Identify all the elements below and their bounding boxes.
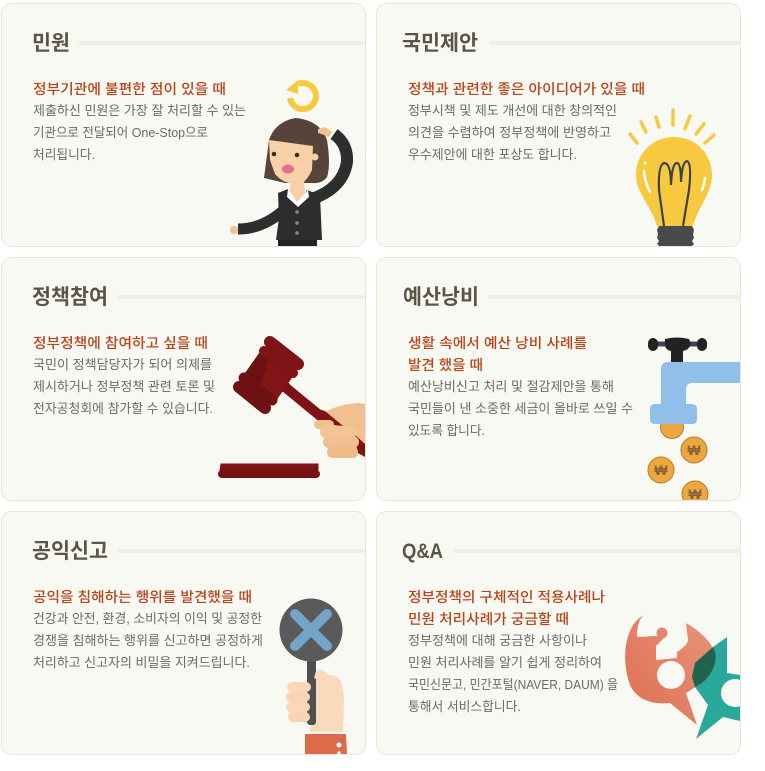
icon: faucet dripping coins: ₩ [654,462,668,478]
subheading: 국민제안: 정책과 관련한 좋은 아이디어가 있을 때 [408,81,645,97]
text block: 국민제안: 정부시책 및 제도 개선에 대한 창의적인 [408,103,617,118]
text block: 국민제안: 우수제안에 대한 포상도 합니다. [408,147,577,162]
heading: 예산낭비: 예산낭비 [403,286,479,309]
heading: 정책참여: 정책참여 [32,286,108,309]
text block: 국민제안 [408,103,617,162]
subheading: 예산낭비 [408,335,587,373]
text block: Q&A: 통해서 서비스합니다. [408,699,521,714]
heading: Q&A: Q&A [402,540,443,563]
text block: 공익신고: 건강과 안전, 환경, 소비자의 이익 및 공정한 [33,611,262,626]
text block: 공익신고: 처리하고 신고자의 비밀을 지켜드립니다. [33,655,250,670]
text block: 정책참여: 전자공청회에 참가할 수 있습니다. [33,401,213,416]
panel: 민원 [2,4,366,246]
text block: 정책참여: 국민이 정책담당자가 되어 의제를 [33,357,212,372]
subheading: Q&A [408,589,605,627]
text block: 예산낭비: 예산낭비신고 처리 및 절감제안을 통해 [408,379,614,394]
text block: Q&A: 국민신문고, 민간포털(NAVER, DAUM) 을 [408,677,618,692]
text block: 공익신고 [33,611,263,670]
text block: 정책참여: 제시하거나 정부정책 관련 토론 및 [33,379,215,394]
text block: 민원: 기관으로 전달되어 One-Stop으로 [33,125,208,140]
panel: Q&A [376,512,749,754]
text block: 예산낭비: 있도록 합니다. [408,423,485,438]
text block: 국민제안: 의견을 수렴하여 정부정책에 반영하고 [408,125,611,140]
text block: Q&A [408,633,618,714]
heading: 국민제안: 국민제안 [402,32,478,55]
icon: light bulb [630,110,714,246]
icon: X sign held in hand [280,598,347,755]
text block: 예산낭비: 국민들이 낸 소중한 세금이 올바로 쓰일 수 [408,401,633,416]
subheading: Q&A: 민원 처리사례가 궁금할 때 [408,611,569,627]
heading: 민원: 민원 [32,32,70,55]
text block: 정책참여 [33,357,215,416]
panel: 공익신고 [2,512,366,755]
icon: confused woman [230,118,347,246]
text block: 민원 [33,103,246,162]
text block: Q&A: 민원 처리사례를 알기 쉽게 정리하여 [408,655,602,670]
text block: 민원: 처리됩니다. [33,147,95,162]
text block: 공익신고: 경쟁을 침해하는 행위를 신고하면 공정하게 [33,633,263,648]
subheading: 민원: 정부기관에 불편한 점이 있을 때 [33,81,226,97]
icon: faucet dripping coins: ₩ [687,442,701,458]
text block: Q&A: 정부정책에 대해 궁금한 사항이나 [408,633,587,648]
icon: faucet dripping coins: ₩ [688,486,702,502]
subheading: Q&A: 정부정책의 구체적인 적용사례나 [408,589,605,605]
panel: 국민제안 [376,4,741,246]
text block: 민원: 제출하신 민원은 가장 잘 처리할 수 있는 [33,103,246,118]
text block: 예산낭비 [408,379,633,438]
subheading: 공익신고: 공익을 침해하는 행위를 발견했을 때 [33,589,252,605]
heading: 공익신고: 공익신고 [32,540,108,563]
subheading: 예산낭비: 발견 했을 때 [408,357,483,373]
subheading: 정책참여: 정부정책에 참여하고 싶을 때 [33,335,208,351]
panel: 예산낭비 [376,258,741,507]
icon: rotating arrow [286,80,316,109]
icon: faucet dripping coins [648,338,740,507]
panel: 정책참여 [2,258,366,500]
icon: gavel in hand [218,342,365,478]
subheading: 예산낭비: 생활 속에서 예산 낭비 사례를 [408,335,587,351]
icon: question mark speech bubbles [625,615,749,739]
